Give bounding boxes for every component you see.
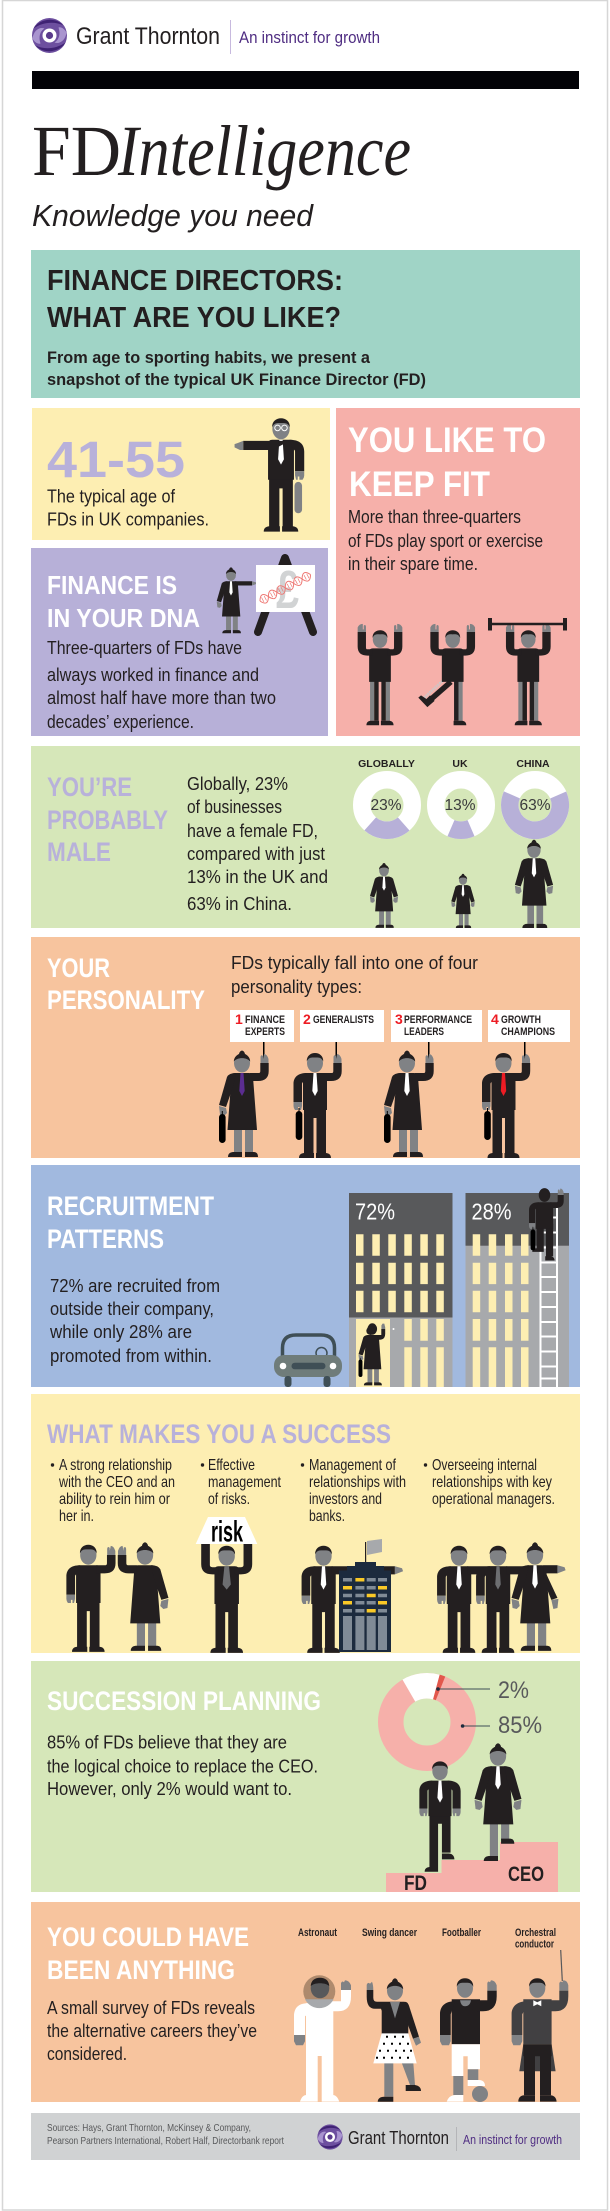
donut chart: 85% and 2%: 85% <box>498 1712 542 1739</box>
succession text <box>47 1732 318 1799</box>
donut chart: globally 23%: GLOBALLY <box>358 758 415 770</box>
sign: growth champions: 4 <box>491 1011 499 1027</box>
donut chart: globally 23%: 23% <box>370 797 402 814</box>
sign: finance experts: EXPERTS <box>245 1026 285 1038</box>
icon: astronaut <box>294 1975 351 2102</box>
footer logo: Grant Thornton: An instinct for growth <box>463 2133 562 2147</box>
sign: generalists <box>300 1010 384 1042</box>
icon: man with white tie holding sign <box>294 1042 342 1158</box>
icon: man climbing ladder <box>529 1188 564 1261</box>
donut chart: UK 13%: UK <box>452 758 468 770</box>
bullet: risk management: management <box>208 1474 281 1491</box>
heading: finance is in your DNA <box>47 570 200 633</box>
panel: recruitment patterns <box>31 1165 580 1387</box>
bullet: risk management: of risks. <box>208 1491 250 1508</box>
black banner bar <box>32 71 579 89</box>
heading: finance directors: FINANCE DIRECTORS: <box>47 265 343 297</box>
heading: succession planning: SUCCESSION PLANNING <box>47 1686 321 1716</box>
donut chart: China 63%: CHINA <box>516 758 550 770</box>
heading: you like to keep fit: KEEP FIT <box>349 465 490 504</box>
heading: you're probably male <box>47 772 168 867</box>
DNA text: decades’ experience. <box>47 712 194 732</box>
icon: car <box>274 1335 342 1387</box>
careers text: considered. <box>47 2044 127 2064</box>
title: FDIntelligence: FD <box>32 111 121 191</box>
label: orchestral conductor: Orchestral <box>515 1927 556 1939</box>
fitness text: of FDs play sport or exercise <box>348 531 543 551</box>
bullet: investors and banks: Management of <box>309 1457 396 1474</box>
DNA text: almost half have more than two <box>47 688 276 708</box>
fitness text <box>348 507 543 574</box>
DNA text <box>47 638 276 732</box>
bullet: risk management: Effective <box>208 1457 255 1474</box>
icon: woman small <box>451 874 475 928</box>
icon: easel with pound sign and DNA helix: £ <box>276 560 299 620</box>
footer logo: Grant Thornton <box>317 2124 562 2151</box>
sign: performance leaders: 3 <box>395 1011 403 1027</box>
icon: man holding risk sign: risk <box>211 1516 243 1548</box>
icon: man on FD step <box>419 1761 461 1872</box>
succession text: However, only 2% would want to. <box>47 1779 292 1799</box>
icon: woman entering door <box>358 1323 385 1385</box>
sign: finance experts: FINANCE <box>245 1014 285 1026</box>
heading: finance directors: WHAT ARE YOU LIKE? <box>47 302 341 334</box>
sources text: Sources: Hays, Grant Thornton, McKinsey & Company, <box>47 2122 251 2134</box>
gender text: of businesses <box>187 797 282 817</box>
heading: your personality: PERSONALITY <box>47 985 205 1015</box>
heading: finance is in your DNA: IN YOUR DNA <box>47 603 200 633</box>
sign: generalists: 2 <box>303 1011 311 1027</box>
sign: performance leaders: LEADERS <box>404 1026 444 1038</box>
careers text <box>47 1998 257 2064</box>
heading: you like to keep fit: YOU LIKE TO <box>348 421 546 460</box>
intro text: From age to sporting habits, we present a <box>47 348 371 367</box>
gender text: have a female FD, <box>187 821 318 841</box>
header logo: Grant Thornton <box>32 18 380 54</box>
bullet: investors and banks: investors and <box>309 1491 382 1508</box>
label: orchestral conductor <box>515 1927 556 1950</box>
bullet: investors and banks <box>301 1457 406 1525</box>
chart: building 28% with ladder: 28% <box>472 1198 512 1224</box>
icon: figure lifting barbell <box>488 618 567 725</box>
recruitment text <box>49 1276 220 1366</box>
gender text: compared with just <box>187 844 325 864</box>
panel: probably male <box>31 746 580 928</box>
gender text: 63% in China. <box>187 894 292 914</box>
bullet: CEO relationship: ability to rein him or <box>59 1491 171 1508</box>
donut chart: China 63% <box>502 758 568 838</box>
bullet: investors and banks: relationships with <box>309 1474 406 1491</box>
icon: ladder <box>540 1208 557 1387</box>
recruitment text: 72% are recruited from <box>50 1276 220 1296</box>
heading: you could have been anything: YOU COULD HAVE <box>47 1922 249 1952</box>
icon: easel with pound sign and DNA helix <box>256 558 315 632</box>
chart: building 72% <box>349 1193 452 1387</box>
heading: you're probably male: MALE <box>47 837 111 867</box>
heading: your personality <box>47 953 205 1015</box>
heading: finance is in your DNA: FINANCE IS <box>47 570 177 600</box>
heading: you're probably male: YOU’RE <box>47 772 132 802</box>
careers text: A small survey of FDs reveals <box>47 1998 255 2018</box>
icon: man holding risk sign <box>196 1516 257 1653</box>
icon: pointing man with glasses <box>235 418 304 532</box>
panel: age <box>32 408 330 540</box>
icon: woman large <box>515 840 553 928</box>
icon: footballer <box>440 1978 497 2102</box>
label: orchestral conductor: conductor <box>515 1938 555 1950</box>
header logo: Grant Thornton: An instinct for growth <box>239 28 380 47</box>
careers text: the alternative careers they’ve <box>47 2021 257 2041</box>
chart: building 72%: 72% <box>355 1198 395 1224</box>
age text: FDs in UK companies. <box>47 510 209 530</box>
icon: man and woman high five <box>66 1542 168 1652</box>
gender text: 13% in the UK and <box>187 867 328 887</box>
bullet: CEO relationship: with the CEO and an <box>58 1474 175 1491</box>
gender text: Globally, 23% <box>187 774 288 794</box>
sign: generalists: GENERALISTS <box>313 1014 374 1026</box>
fitness text: in their spare time. <box>348 554 478 574</box>
sign: growth champions: CHAMPIONS <box>501 1026 555 1038</box>
donut chart: UK 13% <box>428 758 494 838</box>
bullet: investors and banks: banks. <box>309 1508 345 1525</box>
recruitment text: while only 28% are <box>49 1322 192 1342</box>
bullet: internal relationships: Overseeing internal <box>432 1457 537 1474</box>
chart: steps FD to CEO: FD <box>404 1872 427 1895</box>
chart: steps FD to CEO <box>386 1842 558 1895</box>
intro text <box>47 348 426 389</box>
title: FDIntelligence <box>32 111 411 191</box>
icon: man with office building <box>302 1539 403 1653</box>
heading: recruitment patterns: PATTERNS <box>47 1224 164 1254</box>
bullet: CEO relationship <box>51 1457 175 1525</box>
donut chart: 85% and 2% <box>377 1672 542 1772</box>
DNA text: always worked in finance and <box>47 665 259 685</box>
panel: personality <box>31 937 580 1158</box>
big number 41-55: 41-55 <box>47 431 185 488</box>
sign: performance leaders <box>391 1010 482 1042</box>
sign: finance experts <box>230 1010 294 1042</box>
bullet: risk management <box>201 1457 281 1508</box>
icon: woman with purple tie holding sign <box>219 1042 269 1157</box>
sign: performance leaders: PERFORMANCE <box>404 1014 472 1026</box>
heading: you could have been anything: BEEN ANYTHING <box>47 1955 235 1985</box>
sign: growth champions <box>488 1010 570 1042</box>
panel: could have been anything <box>31 1902 580 2102</box>
chart: steps FD to CEO: CEO <box>508 1863 544 1886</box>
age text: The typical age of <box>47 486 176 506</box>
personality text: FDs typically fall into one of four <box>231 953 478 973</box>
gender text <box>187 774 328 914</box>
header logo: Grant Thornton: Grant Thornton <box>76 23 220 50</box>
heading: recruitment patterns: RECRUITMENT <box>47 1191 214 1221</box>
donut chart: globally 23% <box>351 758 423 841</box>
sign: finance experts: 1 <box>235 1011 243 1027</box>
icon: swing dancer <box>367 1978 421 2102</box>
heading: you're probably male: PROBABLY <box>47 805 168 835</box>
title: FDIntelligence: Intelligence <box>117 111 411 191</box>
intro text: snapshot of the typical UK Finance Director (FD) <box>47 370 426 389</box>
age text <box>47 486 209 530</box>
icon: woman with white tie holding sign <box>384 1042 434 1157</box>
sources text: Pearson Partners International, Robert Half, Directorbank report <box>47 2135 284 2147</box>
recruitment text: outside their company, <box>50 1299 214 1319</box>
heading: what makes you a success: WHAT MAKES YOU A SUCCESS <box>47 1419 391 1449</box>
bullet: CEO relationship: her in. <box>59 1508 94 1525</box>
footer logo: Grant Thornton: Grant Thornton <box>348 2128 449 2148</box>
bullet: internal relationships <box>424 1457 555 1508</box>
label: footballer: Footballer <box>442 1927 482 1939</box>
bullet: internal relationships: relationships with key <box>432 1474 552 1491</box>
DNA text: Three-quarters of FDs have <box>47 638 242 658</box>
personality text: personality types: <box>231 977 362 997</box>
panel: succession planning <box>31 1661 580 1895</box>
icon: three colleagues arm in arm <box>437 1542 566 1653</box>
donut chart: UK 13%: 13% <box>444 797 476 814</box>
icon: orchestral conductor <box>512 1950 568 2102</box>
chart: building 28% with ladder <box>466 1193 569 1387</box>
panel: finance in your DNA <box>31 548 328 736</box>
heading: finance directors <box>47 265 343 334</box>
heading: you like to keep fit <box>348 421 546 504</box>
personality text <box>231 953 478 997</box>
icon: woman presenting <box>217 567 257 633</box>
recruitment text: promoted from within. <box>50 1346 212 1366</box>
fitness text: More than three-quarters <box>348 507 521 527</box>
icon: figure with arms raised <box>358 624 402 725</box>
succession text: the logical choice to replace the CEO. <box>47 1756 318 1776</box>
donut chart: 85% and 2%: 2% <box>498 1677 529 1704</box>
heading: your personality: YOUR <box>47 953 110 983</box>
icon: man with red tie holding sign <box>482 1042 530 1158</box>
bullet: internal relationships: operational managers. <box>432 1491 555 1508</box>
icon: woman on CEO step <box>475 1743 521 1861</box>
footer bar <box>31 2113 580 2160</box>
donut chart: China 63%: 63% <box>519 797 551 814</box>
icon: woman medium <box>370 863 398 928</box>
heading: recruitment patterns <box>47 1191 214 1254</box>
tagline: Knowledge you need <box>32 198 315 233</box>
panel: what makes you a success <box>31 1394 580 1653</box>
sources text <box>47 2122 284 2147</box>
label: astronaut: Astronaut <box>298 1927 337 1939</box>
label: swing dancer: Swing dancer <box>362 1927 418 1939</box>
heading: you could have been anything <box>47 1922 249 1985</box>
succession text: 85% of FDs believe that they are <box>47 1732 287 1752</box>
icon: figure kicking <box>418 624 475 725</box>
bullet: CEO relationship: A strong relationship <box>59 1457 172 1474</box>
panel: intro <box>31 250 580 398</box>
sign: growth champions: GROWTH <box>501 1014 541 1026</box>
panel: keep fit <box>336 408 580 736</box>
